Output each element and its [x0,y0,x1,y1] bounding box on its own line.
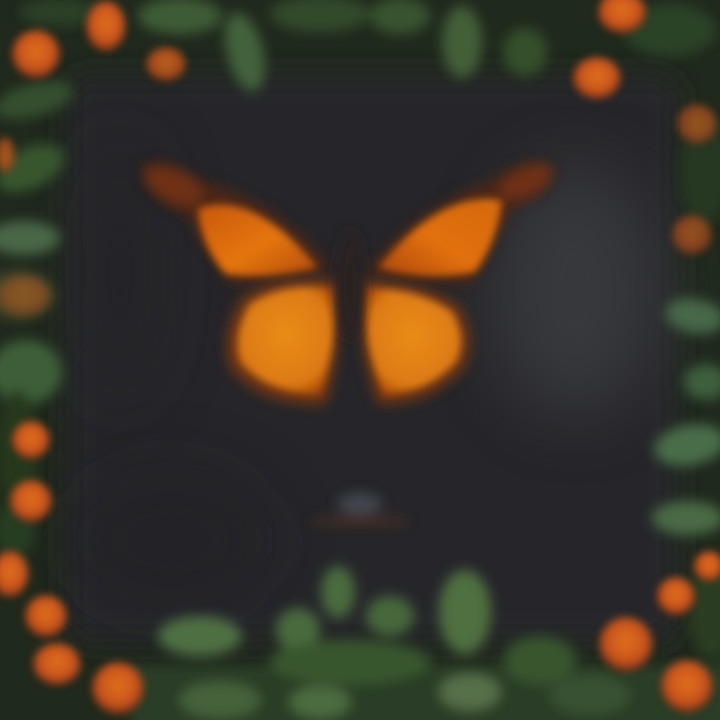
right foliage [651,115,720,660]
faint caption smudge [310,493,410,525]
right lower wing [359,280,470,404]
butterfly body [336,230,364,340]
left lower wing [226,277,340,404]
bottom foliage [130,566,720,720]
left upper wing [140,160,330,284]
left foliage [0,74,77,558]
dark slate panel [66,76,678,642]
butterfly [140,158,557,404]
top foliage [20,0,716,95]
right upper wing [366,158,557,284]
